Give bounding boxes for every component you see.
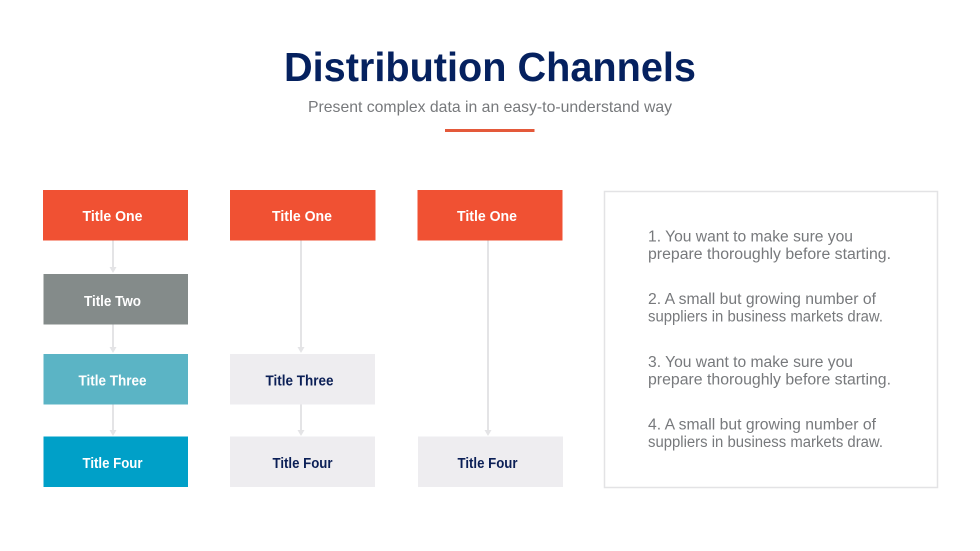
note 3 — [648, 354, 891, 388]
note 2: suppliers in business markets draw. — [648, 308, 883, 326]
title underline accent — [445, 129, 534, 132]
box: title one: Title One — [457, 209, 517, 225]
box: title three: Title Three — [78, 374, 146, 390]
box: title one: Title One — [272, 209, 332, 225]
box: title four — [418, 436, 563, 487]
arrow: two to three — [110, 324, 116, 353]
box: title two: Title Two — [84, 294, 141, 310]
box: title one — [418, 190, 562, 240]
note 1 — [648, 228, 891, 263]
note 4: 4. A small but growing number of — [648, 416, 877, 434]
box: title three: Title Three — [266, 374, 334, 390]
box: title one — [230, 190, 376, 240]
note 1: prepare thoroughly before starting. — [648, 246, 891, 263]
box: title one: Title One — [82, 209, 142, 225]
arrow: three to four — [298, 404, 304, 436]
column 2 flow — [230, 190, 376, 487]
note 4 — [648, 416, 883, 451]
box: title three — [44, 354, 188, 404]
note 2 — [648, 291, 883, 326]
panel: numbered notes — [604, 192, 938, 488]
box: title four: Title Four — [458, 456, 518, 472]
column 3 flow — [418, 190, 563, 487]
note 2: 2. A small but growing number of — [648, 291, 877, 308]
box: title one — [43, 190, 188, 240]
note 1: 1. You want to make sure you — [648, 228, 853, 246]
arrow: three to four — [110, 404, 116, 436]
arrow: one to two — [110, 240, 116, 273]
subtitle: Present complex data in an easy-to-understand way — [308, 99, 672, 116]
note 3: 3. You want to make sure you — [648, 354, 853, 371]
box: title two — [44, 274, 188, 324]
box: title four: Title Four — [272, 456, 333, 472]
box: title four — [230, 436, 375, 487]
note 4: suppliers in business markets draw. — [648, 434, 883, 451]
box: title four: Title Four — [82, 456, 143, 472]
title: Distribution Channels — [284, 44, 696, 90]
arrow: one to three — [298, 240, 304, 353]
box: title four — [44, 436, 188, 487]
column 1 flow — [43, 190, 188, 487]
box: title three — [230, 354, 375, 404]
arrow: one to four — [484, 240, 492, 436]
note 3: prepare thoroughly before starting. — [648, 372, 891, 388]
